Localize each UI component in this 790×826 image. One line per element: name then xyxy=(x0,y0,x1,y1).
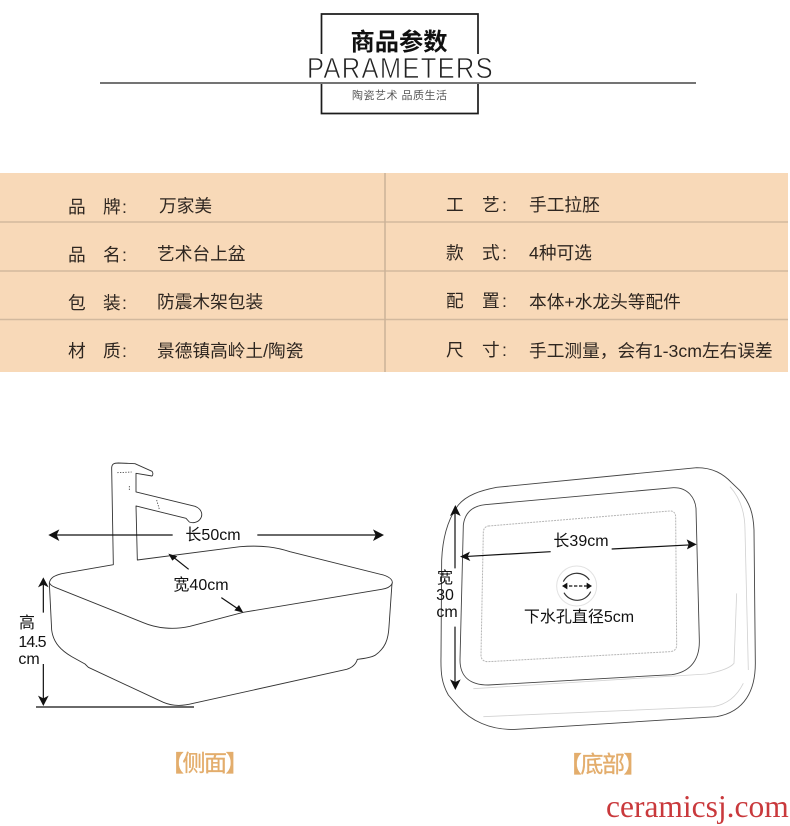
label: height 14.5cm xyxy=(18,614,47,668)
row: material: 景德镇高岭土/陶瓷 xyxy=(157,341,303,361)
header: parameters title block xyxy=(100,14,696,114)
label: drain diameter: 下水孔直径5cm xyxy=(524,608,634,626)
row: craft: 工 xyxy=(446,195,464,215)
row: packaging xyxy=(68,292,263,313)
row: product name: 艺术台上盆 xyxy=(157,244,246,264)
header rule xyxy=(100,82,696,84)
row: size: 寸 xyxy=(482,340,500,360)
row: brand xyxy=(68,196,212,217)
label: width 40cm: 宽40cm xyxy=(173,576,229,594)
row: product name: 品 xyxy=(68,245,86,265)
row: packaging: 防震木架包装 xyxy=(157,292,263,312)
row: brand: 品 xyxy=(68,197,86,217)
row: product name xyxy=(68,244,246,265)
row: craft: 手工拉胚 xyxy=(529,195,600,215)
label: length 50cm: 长50cm xyxy=(185,526,241,544)
arrow: width xyxy=(168,554,243,613)
label: height 14.5cm: 高 xyxy=(19,614,35,632)
panel: side view diagram xyxy=(18,463,392,707)
row: packaging: 包 xyxy=(68,293,86,313)
icon: drain hole xyxy=(562,573,592,600)
row: configuration: 置 xyxy=(482,291,500,311)
arrow: width xyxy=(450,505,461,690)
heading: chinese title: 商品参数 xyxy=(350,28,448,56)
row: brand: : xyxy=(122,197,127,217)
row: configuration: 配 xyxy=(446,291,464,311)
row: configuration: : xyxy=(502,291,507,311)
panel: parameters table xyxy=(0,173,788,372)
header frame xyxy=(322,14,478,114)
row: size: : xyxy=(502,340,507,360)
row: material xyxy=(68,341,303,361)
heading: parameters: PARAMETERS xyxy=(307,51,493,84)
label: height 14.5cm: cm xyxy=(18,651,40,668)
watermark: ceramicsj.com xyxy=(606,789,789,824)
row: material: 材 xyxy=(68,341,86,361)
label: width 30cm: cm xyxy=(436,604,458,621)
subtitle: 陶瓷艺术 品质生活 xyxy=(352,88,447,102)
arrow: length xyxy=(48,529,384,541)
caption: bottom: 【底部】 xyxy=(559,751,645,777)
row: product name: 名 xyxy=(103,245,121,265)
row: packaging: 装 xyxy=(103,293,121,313)
row: size: 手工测量，会有1-3cm左右误差 xyxy=(529,341,773,361)
row: material: 质 xyxy=(103,341,121,361)
row: craft: : xyxy=(502,195,507,215)
arrow: length xyxy=(460,539,697,561)
row: configuration: 本体+水龙头等配件 xyxy=(529,292,681,312)
row: material: : xyxy=(122,341,127,361)
icon: basin underside outline xyxy=(441,468,755,729)
row: styles xyxy=(446,243,592,263)
label: length 39cm: 长39cm xyxy=(553,532,609,550)
icon: basin and faucet outline xyxy=(36,463,392,707)
row: styles: 式 xyxy=(482,243,500,263)
row: styles: 款 xyxy=(446,243,464,263)
row: product name: : xyxy=(122,245,127,265)
panel: bottom view diagram xyxy=(436,468,755,729)
arrow: height xyxy=(36,577,194,707)
row: configuration xyxy=(446,291,681,312)
label: height 14.5cm: 14.5 xyxy=(18,634,47,651)
row: styles: 4种可选 xyxy=(529,243,592,263)
caption: side: 【侧面】 xyxy=(161,750,247,776)
row: size: 尺 xyxy=(446,340,464,360)
row: brand: 牌 xyxy=(103,197,121,217)
label: width 30cm xyxy=(436,569,458,621)
row: craft: 艺 xyxy=(482,195,500,215)
label: width 30cm: 宽 xyxy=(437,569,453,587)
row: brand: 万家美 xyxy=(159,196,212,216)
row: packaging: : xyxy=(122,293,127,313)
label: width 30cm: 30 xyxy=(436,587,454,604)
row: craft xyxy=(446,195,600,215)
table background xyxy=(0,173,788,372)
row: styles: : xyxy=(502,243,507,263)
